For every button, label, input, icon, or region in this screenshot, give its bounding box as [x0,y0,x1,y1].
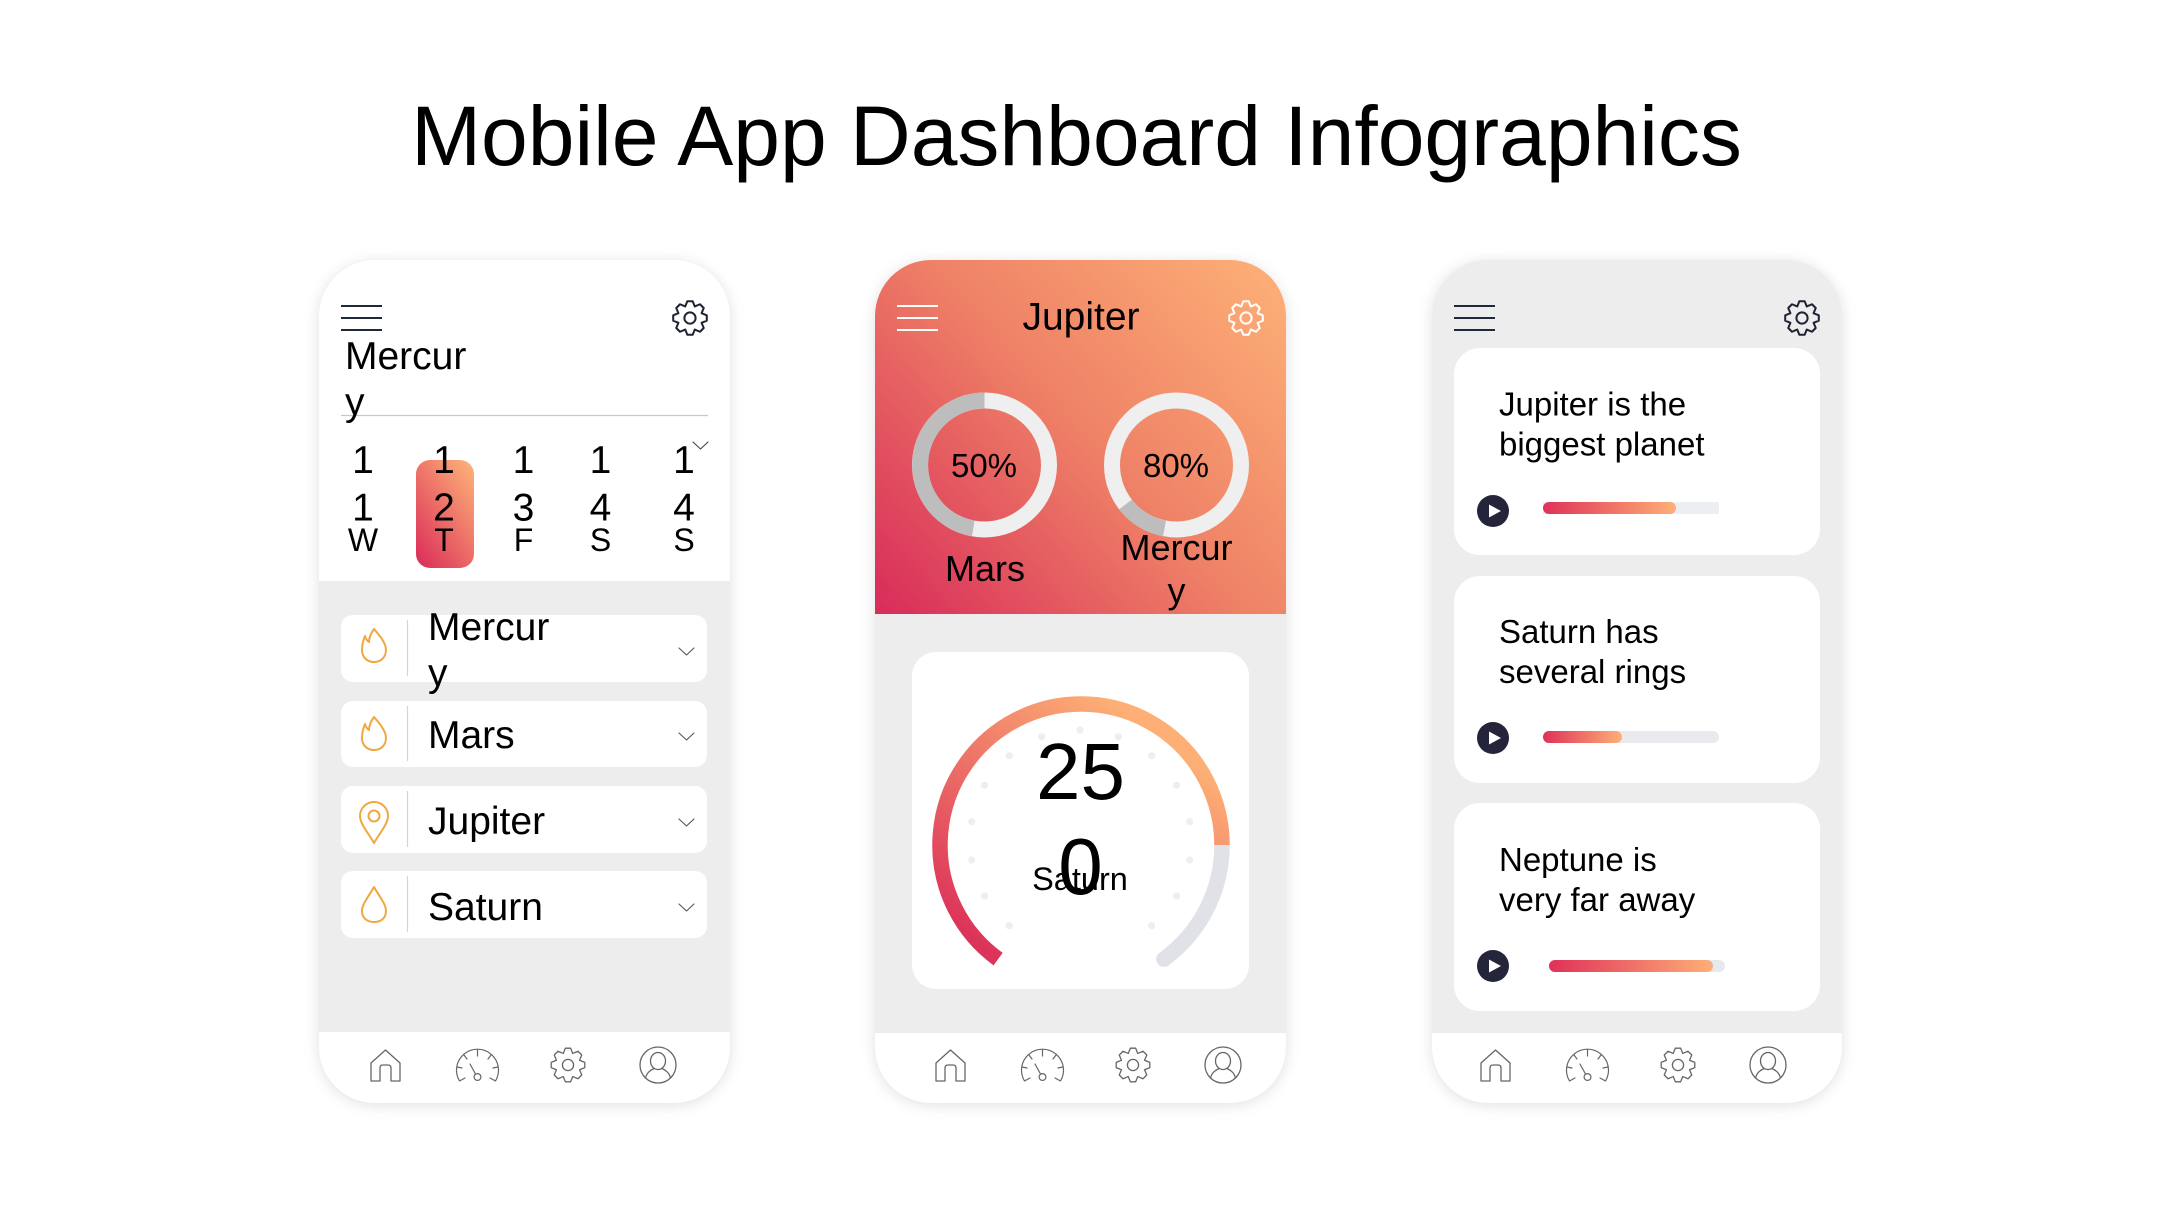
calendar day: 12 T: T [434,522,454,558]
card: Jupiter fact [1454,348,1820,555]
heading: Jupiter: Jupiter [1022,296,1140,338]
bottom navigation [371,1047,676,1083]
calendar day: 12 T: 1 [433,439,455,482]
progress bar [1543,731,1719,743]
icon: gauge [456,1049,498,1081]
bottom navigation [936,1047,1241,1083]
icon: flame [362,629,386,662]
gauge progress arc [940,704,1222,959]
icon: gauge [1566,1049,1608,1081]
phone 2 gradient header [875,260,1286,614]
progress bar [1549,960,1725,972]
list row: Mercury [341,606,707,695]
icon: settings gear [1229,301,1263,335]
panel: phone 3 facts [1432,260,1842,1103]
heading: Mercury: Mercur [345,335,466,378]
heading: Mercury: y [345,381,365,424]
panel: phone 2 stats and gauge [875,260,1286,1103]
icon: menu [341,306,382,330]
donut chart: Mars 50% [920,400,1049,530]
phone 3 body [1432,260,1842,1103]
icon: settings gear [1785,301,1819,335]
calendar day: 12 T: 2 [433,486,455,530]
icon: home [371,1050,400,1081]
calendar day: 11 W: 1 [352,486,374,530]
text: Neptune is [1499,841,1657,878]
list row: Saturn [341,871,707,938]
card: Neptune fact [1454,803,1820,1011]
icon: profile [640,1047,676,1083]
icon: chevron [679,648,694,655]
phone 2 grey content area [875,614,1286,1033]
list row: Jupiter [341,786,707,853]
icon: home [1481,1050,1510,1081]
gauge track [1156,845,1222,967]
icon: chevron [679,904,694,911]
calendar day: 13 F: F [514,522,533,558]
calendar highlight pill [416,460,474,568]
calendar day: 14 S: S [590,522,611,558]
gauge card [912,652,1249,989]
label: Mars: Mars [428,714,515,757]
icon: settings [551,1048,585,1082]
icon: play [1477,495,1509,527]
icon: location pin [360,802,388,843]
label: Mercury: y [1168,570,1186,611]
icon: gauge [1022,1049,1064,1081]
calendar day: 14 S: 4 [590,486,611,530]
icon: settings [1661,1048,1695,1082]
calendar day: 14 S: 4 [673,486,695,530]
label: Jupiter: Jupiter [428,800,545,843]
label: Saturn: Saturn [428,886,543,929]
icon: settings [1116,1048,1150,1082]
icon: play [1477,950,1509,982]
donut chart: Mercury 80% [1112,400,1241,530]
phone 2 body [875,260,1286,1103]
gauge dial dots [968,726,1193,929]
card: Saturn fact [1454,576,1820,783]
calendar day: 13 F: 3 [513,486,534,530]
label: Mercury: Mercur [428,606,549,649]
calendar day: 14 S: S [673,522,695,558]
icon: flame [362,717,386,750]
gauge value 250: 0 [1058,822,1103,911]
value: 80% [1143,447,1209,484]
icon: settings gear [673,301,707,335]
gauge label: Saturn: Saturn [1032,861,1128,897]
icon: home [936,1050,965,1081]
divider under heading [341,414,708,416]
icon: profile [1205,1047,1241,1083]
text: very far away [1499,881,1696,918]
icon: chevron [679,733,694,740]
title: Mobile App Dashboard Infographics [411,89,1742,183]
calendar day: 14 S: 1 [673,439,695,482]
calendar day: 11 W: W [348,522,379,558]
icon: menu [1454,306,1495,330]
icon: play [1477,722,1509,754]
phone 3 grey content area [1432,260,1842,1033]
panel: phone 1 calendar and list [319,260,730,1103]
text: biggest planet [1499,426,1704,462]
gauge value 250: 25 [1036,727,1125,816]
label: Mars: Mars [945,548,1025,589]
list row: Mars [341,701,707,767]
icon: calendar chevron [693,442,708,449]
bottom navigation [1481,1047,1786,1083]
icon: chevron [679,819,694,826]
phone 1 grey content area [319,581,730,1032]
label: Mercury: Mercur [1120,527,1233,568]
text: several rings [1499,653,1686,690]
phone 1 body [319,260,730,1103]
value: 50% [951,447,1017,484]
progress bar [1543,502,1719,514]
calendar day: 13 F: 1 [513,439,534,482]
label: Mercury: y [428,652,448,695]
calendar day: 14 S: 1 [590,439,611,482]
text: Saturn has [1499,613,1659,650]
icon: water drop [362,887,386,922]
text: Jupiter is the [1499,386,1686,422]
icon: menu [897,306,938,330]
calendar day: 11 W: 1 [352,439,374,482]
icon: profile [1750,1047,1786,1083]
